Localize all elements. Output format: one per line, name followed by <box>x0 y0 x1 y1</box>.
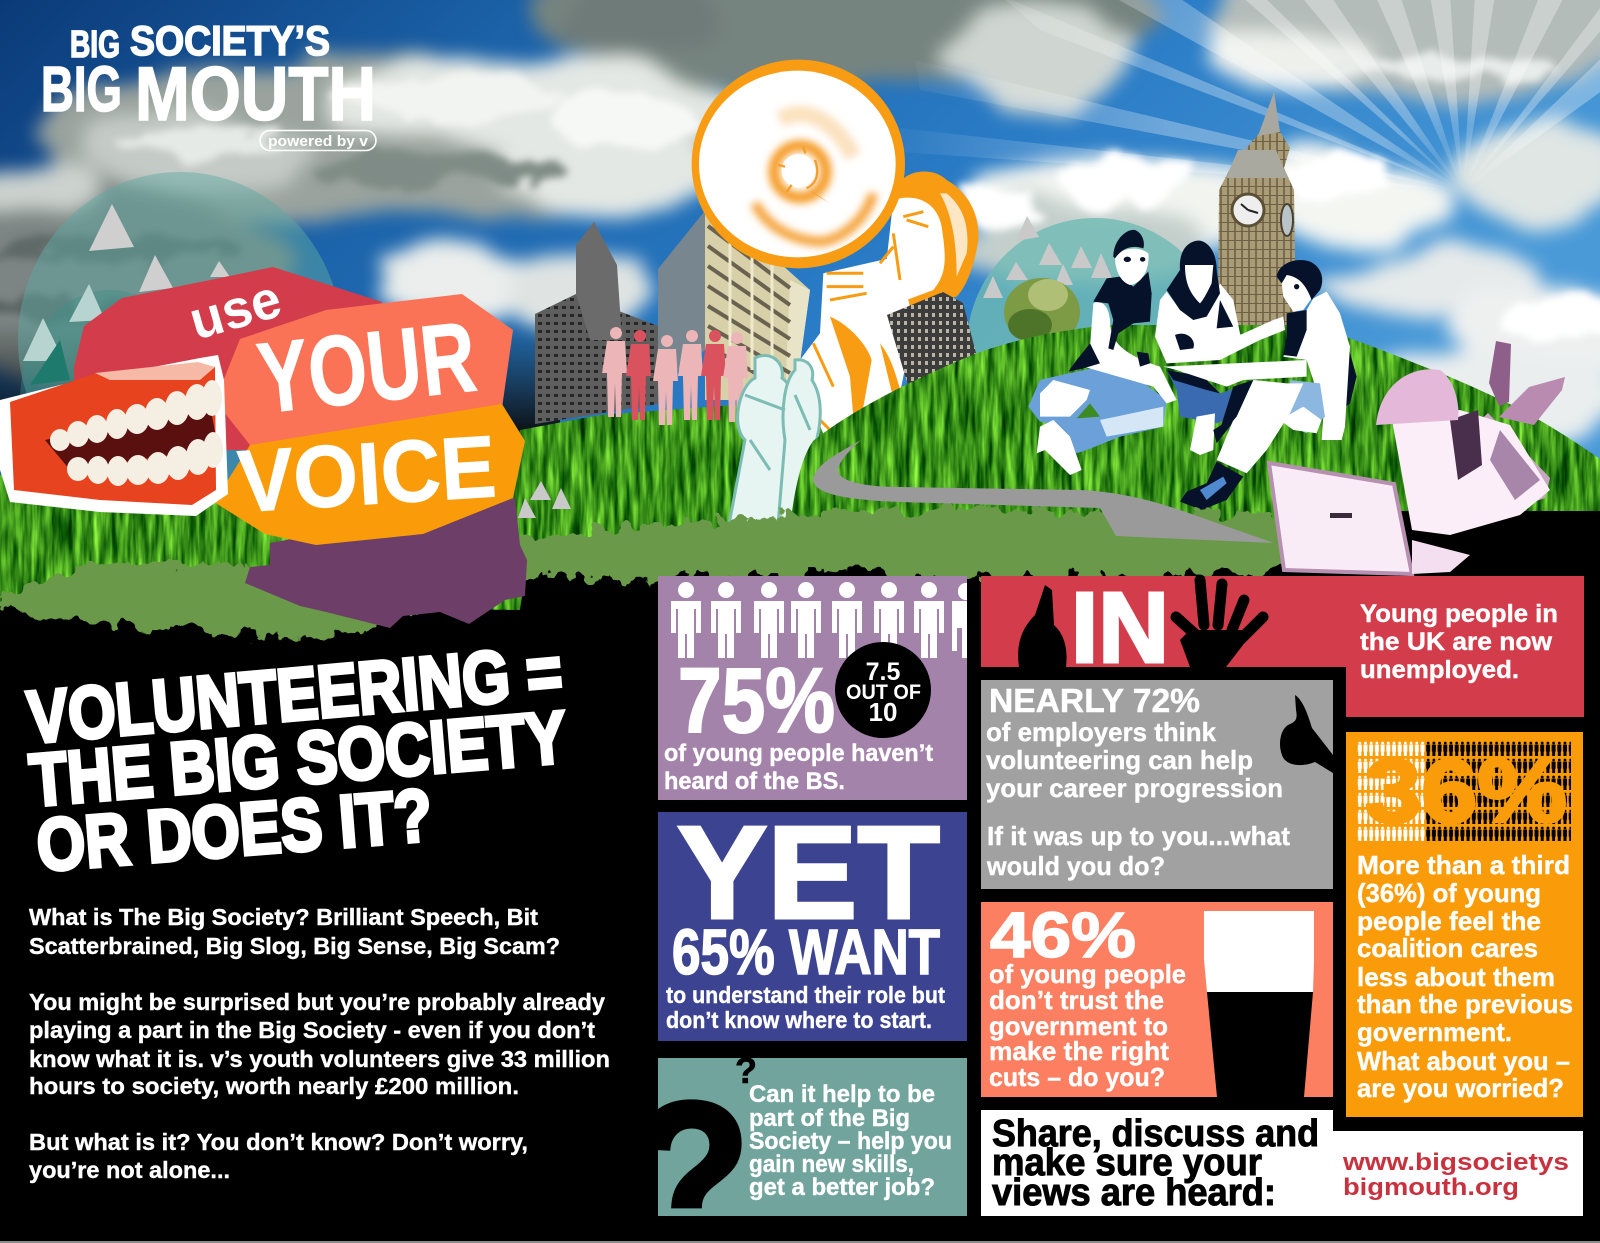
panel: can it help <box>632 1050 967 1243</box>
tree <box>1004 278 1080 346</box>
use: use <box>183 269 288 352</box>
caption: are you worried? <box>1357 1073 1564 1103</box>
cloud highlights <box>0 58 1600 346</box>
call to action <box>992 1113 1319 1214</box>
voice: VOICE <box>235 416 499 531</box>
headline line one: VOLUNTEERING = <box>24 630 565 759</box>
65% want: 65% WANT <box>672 916 940 988</box>
panel: 46% <box>981 899 1333 1097</box>
stat 75%: 75% <box>678 650 835 752</box>
caption: part of the Big <box>749 1105 910 1132</box>
red blob <box>74 267 382 450</box>
clouds <box>0 0 1600 450</box>
caption: the UK are now <box>1360 628 1553 656</box>
icon: half-empty pint glass <box>1204 911 1314 1097</box>
caption <box>749 1081 952 1201</box>
caption: of young people haven’t <box>664 740 933 767</box>
badge: 7.5 out of 10: 7.5 <box>866 658 900 686</box>
panel: 75 percent <box>658 576 967 800</box>
main headline <box>24 630 570 887</box>
person middle <box>1155 241 1307 455</box>
IN: IN <box>1071 572 1169 684</box>
black wedge under hill on right <box>1361 511 1600 576</box>
intro body text: you’re not alone... <box>29 1157 230 1183</box>
headline line three: OR DOES IT? <box>34 773 435 887</box>
use your voice speech blobs <box>74 267 527 628</box>
grey curved arrow <box>813 440 1274 543</box>
caption: get a better job? <box>749 1174 935 1201</box>
caption: cuts – do you? <box>989 1062 1165 1092</box>
teal dome with triangles, right <box>967 216 1223 474</box>
back grass field <box>500 400 1000 560</box>
website address: www.bigsocietys <box>1342 1149 1569 1176</box>
purple blob <box>245 498 527 628</box>
stat: 36% <box>1365 742 1567 842</box>
caption <box>1360 600 1558 684</box>
caption: your career progression <box>986 773 1283 803</box>
caption: coalition cares <box>1357 933 1538 963</box>
caption: volunteering can help <box>986 745 1253 775</box>
caption: More than a third <box>1357 850 1570 880</box>
caption <box>1357 850 1573 1103</box>
Big Ben clock tower <box>1218 92 1296 325</box>
intro body text: playing a part in the Big Society - even if you don’t <box>29 1017 595 1043</box>
bell <box>692 60 905 268</box>
sun rays <box>900 0 1600 191</box>
youth group sitting on hill <box>1028 230 1357 510</box>
caption: (36%) of young <box>1357 878 1541 908</box>
caption: unemployed. <box>1360 656 1519 684</box>
caption: of employers think <box>986 717 1217 747</box>
orange blob <box>214 404 525 545</box>
call to action: views are heard: <box>992 1172 1276 1214</box>
intro body text <box>29 904 610 1183</box>
icon: thumbs up <box>1280 695 1333 773</box>
caption: don’t know where to start. <box>666 1007 932 1033</box>
caption: to understand their role but <box>666 982 945 1008</box>
caption: of young people <box>989 959 1186 989</box>
caption: don’t trust the <box>989 985 1164 1015</box>
tower block: Trellick <box>535 222 658 424</box>
caption <box>989 959 1186 1092</box>
people grid <box>1357 741 1571 843</box>
logo line one <box>70 17 330 66</box>
caption: government to <box>989 1011 1168 1041</box>
small tower block <box>887 292 977 392</box>
bell shading <box>755 114 873 242</box>
dark horizon <box>0 320 560 440</box>
intro body text: hours to society, worth nearly £200 million. <box>29 1073 519 1099</box>
logotype: Big Society's Big Mouth <box>41 17 376 150</box>
intro body text: know what it is. v’s youth volunteers give 33 million <box>29 1046 610 1072</box>
caption: would you do? <box>986 851 1165 881</box>
caption <box>986 717 1290 881</box>
caption: than the previous <box>1357 989 1573 1019</box>
small triangles by the blobs <box>518 481 571 518</box>
caption: government. <box>1357 1017 1512 1047</box>
body <box>800 257 910 442</box>
caption: Young people in <box>1360 600 1558 628</box>
badge: 7.5 out of 10 <box>835 642 931 738</box>
hair <box>893 172 978 307</box>
icon: pointing hand <box>1018 585 1067 667</box>
call to action: Share, discuss and <box>992 1113 1319 1155</box>
icon row: people <box>671 582 967 658</box>
intro body text: What is The Big Society? Brilliant Speech, Bit <box>29 904 538 930</box>
red-tinted volunteers group <box>602 327 748 425</box>
left grass field <box>0 475 530 610</box>
panel: share and website <box>981 1110 1583 1216</box>
panel: yet 65% want <box>658 799 967 1041</box>
intro body text: But what is it? You don’t know? Don’t worry, <box>29 1129 528 1155</box>
person right <box>1180 260 1357 510</box>
badge: 7.5 out of 10: OUT OF <box>846 681 921 704</box>
heading: NEARLY 72% <box>989 682 1200 719</box>
caption: people feel the <box>1357 906 1541 936</box>
call to action: make sure your <box>992 1142 1262 1184</box>
person lying with laptop <box>1269 341 1565 574</box>
logo line one: BIG <box>70 24 120 66</box>
caption <box>664 740 933 795</box>
website address: bigmouth.org <box>1343 1174 1519 1201</box>
your: YOUR <box>253 301 481 435</box>
apartment building <box>658 202 810 400</box>
caption: What about you – <box>1357 1046 1570 1076</box>
stat: 46% <box>990 899 1136 971</box>
panel: IN young people unemployed <box>981 572 1584 717</box>
caption: heard of the BS. <box>664 768 845 795</box>
person left <box>1028 230 1177 475</box>
intro body text: You might be surprised but you’re probably already <box>29 989 605 1015</box>
yet: YET <box>677 799 940 946</box>
megaphone and shouting person <box>692 60 978 442</box>
caption: Society – help you <box>749 1128 952 1155</box>
teal-tinted figures <box>728 355 820 530</box>
logo line two: MOUTH <box>135 52 376 137</box>
logo line one: SOCIETY’S <box>130 17 330 64</box>
panel: 36% <box>1346 732 1583 1117</box>
logo line two <box>41 52 376 137</box>
caption <box>666 982 945 1033</box>
salmon blob <box>224 294 513 445</box>
icon: wind-up chattering teeth <box>0 355 228 516</box>
caption: less about them <box>1357 962 1555 992</box>
pale green fringe of grass <box>0 510 1385 640</box>
icon: open hand <box>1176 580 1263 667</box>
website address <box>1342 1149 1569 1201</box>
badge: 7.5 out of 10: 10 <box>869 697 897 727</box>
green hill <box>790 325 1600 525</box>
headline line two: THE BIG SOCIETY <box>27 695 570 822</box>
teal dome with triangles, left <box>18 172 342 510</box>
caption: make the right <box>989 1036 1169 1066</box>
caption: Can it help to be <box>749 1081 935 1108</box>
caption: If it was up to you...what <box>987 821 1290 851</box>
intro body text: Scatterbrained, Big Slog, Big Sense, Big Scam? <box>29 933 560 959</box>
icon: small question mark: ? <box>735 1050 757 1091</box>
sky with clouds and sun rays <box>0 0 1600 530</box>
caption: gain new skills, <box>749 1151 914 1178</box>
logo line two: BIG <box>41 53 122 125</box>
powered by pill: powered by v <box>268 133 369 150</box>
panel: nearly 72% <box>981 680 1333 889</box>
